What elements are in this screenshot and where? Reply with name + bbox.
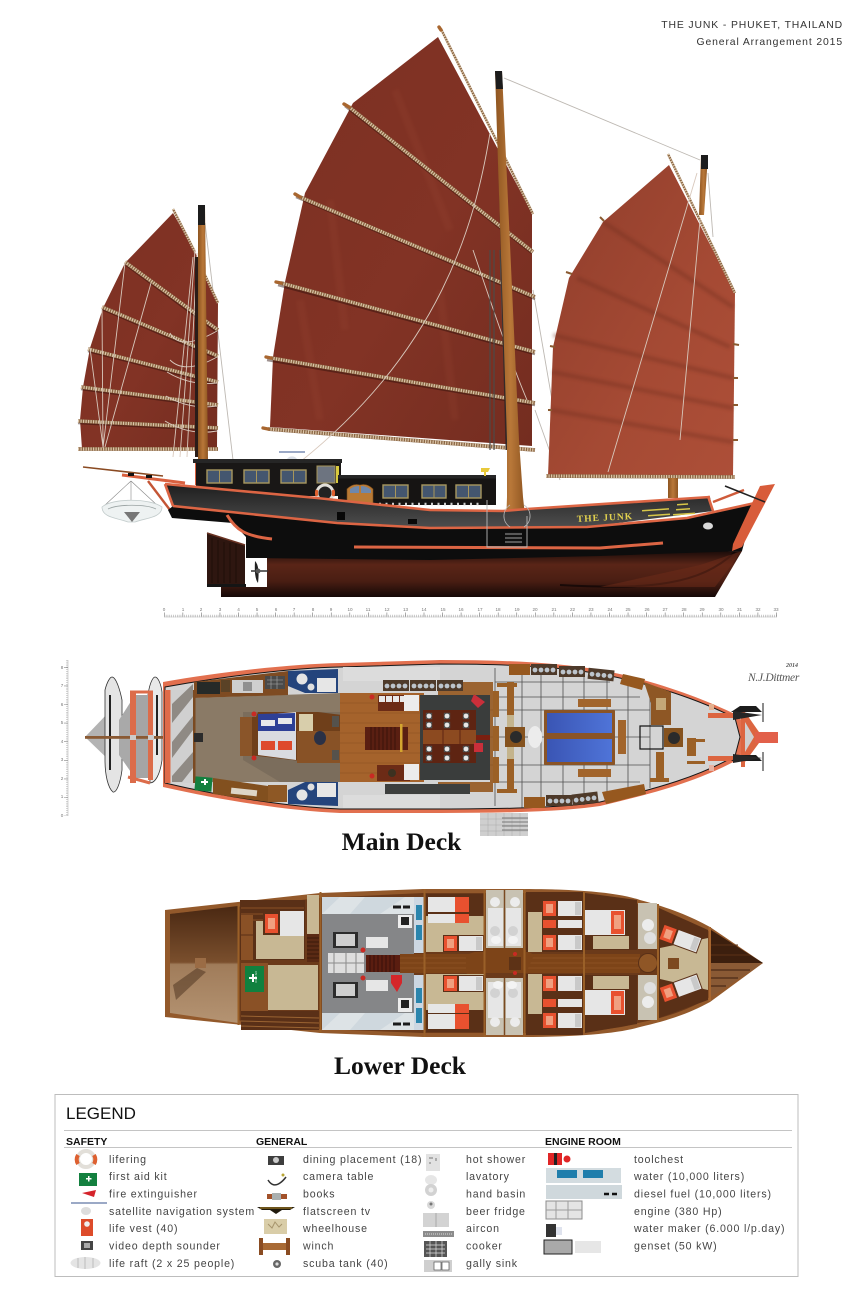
stern deck <box>165 690 193 783</box>
general column continued: gally sink <box>466 1258 518 1270</box>
vertical scale ruler: 5 <box>61 720 64 725</box>
icon: aircon <box>423 1231 454 1237</box>
icon: hot shower <box>426 1154 440 1171</box>
scale ruler: 18 <box>495 607 501 612</box>
dining area <box>420 682 493 792</box>
dinghy stern net and pontoons <box>85 677 172 792</box>
scale ruler: 31 <box>737 607 742 612</box>
general column continued: lavatory <box>466 1171 510 1183</box>
scale ruler: 22 <box>570 607 575 612</box>
aft hold <box>170 906 238 1023</box>
scale ruler: 28 <box>681 607 687 612</box>
blue hatch <box>544 699 626 777</box>
safety column: life vest (40) <box>109 1223 178 1235</box>
propeller <box>250 558 268 587</box>
safety column: first aid kit <box>109 1171 167 1183</box>
column headings: GENERAL <box>256 1136 308 1148</box>
first aid kit room: FIRST AID <box>255 971 258 983</box>
icon: water tanks <box>546 1168 621 1183</box>
scale ruler: 23 <box>588 607 594 612</box>
lower cabin <box>338 468 496 505</box>
vertical scale ruler: 8 <box>61 665 64 670</box>
column headings: ENGINE ROOM <box>545 1136 621 1148</box>
icon: video depth sounder <box>81 1241 93 1250</box>
lifering on cabin <box>316 485 334 501</box>
lower deck plan <box>165 889 763 1037</box>
icon: toolchest <box>548 1153 570 1165</box>
main sail <box>263 27 535 462</box>
general column <box>257 1154 422 1270</box>
aft cabin <box>240 895 319 962</box>
general column continued: beer fridge <box>466 1206 526 1218</box>
scale ruler: 8 <box>312 607 315 612</box>
aft twin cabins <box>426 894 484 1032</box>
vertical scale ruler: 2 <box>61 776 64 781</box>
safety column: lifering <box>109 1154 147 1166</box>
deck hull outline <box>163 660 756 813</box>
general column: flatscreen tv <box>303 1206 371 1218</box>
upper head <box>288 669 338 693</box>
engine room <box>322 897 424 1030</box>
heading: main deck: Main Deck <box>342 827 462 856</box>
vertical scale ruler <box>61 660 68 818</box>
lower hull outline <box>165 889 763 1037</box>
head compartments <box>486 890 523 1035</box>
icon: first aid kit <box>79 1173 97 1186</box>
scale ruler: 11 <box>366 607 371 612</box>
signature: N.J.Dittmer <box>747 672 800 684</box>
scale ruler: 27 <box>662 607 668 612</box>
icon: scuba tank <box>273 1260 281 1268</box>
scale ruler: 10 <box>347 607 353 612</box>
saloon wood floor <box>340 693 424 782</box>
title block: THE JUNK - PHUKET, THAILAND <box>661 20 843 31</box>
icon: hand basin <box>427 1201 435 1209</box>
boarding ladder <box>487 500 530 547</box>
icon: life raft <box>70 1257 100 1269</box>
masts <box>195 71 708 525</box>
scale ruler: 33 <box>773 607 779 612</box>
stem post <box>732 484 775 551</box>
scale ruler: 3 <box>219 607 222 612</box>
aft cockpit floor <box>193 693 340 782</box>
engine room column: diesel fuel (10,000 liters) <box>634 1188 772 1200</box>
foredeck planks <box>480 666 650 808</box>
vertical scale ruler: 7 <box>61 683 64 688</box>
icon: flatscreen tv <box>257 1207 295 1214</box>
rudder <box>207 533 246 587</box>
scale ruler: 19 <box>514 607 520 612</box>
scale ruler: 15 <box>440 607 446 612</box>
icon: life vest <box>81 1219 93 1236</box>
scale ruler: 14 <box>421 607 427 612</box>
rigging behind sails <box>205 78 713 480</box>
engine room column: water (10,000 liters) <box>633 1171 745 1183</box>
column headings: SAFETY <box>66 1136 107 1148</box>
safety column: fire extinguisher <box>109 1188 198 1200</box>
scale ruler: 17 <box>477 607 483 612</box>
general column: dining placement (18) <box>303 1154 422 1166</box>
general column continued: hand basin <box>466 1188 526 1200</box>
general column: books <box>303 1188 335 1200</box>
vertical scale ruler: 0 <box>61 813 64 818</box>
central corridor <box>366 948 640 980</box>
main deck plan <box>85 660 778 836</box>
icon: lifering <box>77 1151 95 1167</box>
scale ruler: 21 <box>551 607 557 612</box>
scale ruler: 2 <box>200 607 203 612</box>
scale ruler: 25 <box>625 607 631 612</box>
scale ruler: 24 <box>607 607 613 612</box>
forward heads <box>638 903 658 1020</box>
forward deck fittings <box>640 682 714 782</box>
scale ruler: 5 <box>256 607 259 612</box>
general column continued: cooker <box>466 1240 503 1252</box>
engine room column: water maker (6.000 l/p.day) <box>633 1223 785 1235</box>
sat nav dome <box>279 451 305 459</box>
icon: dining placement <box>268 1156 284 1165</box>
foredeck masts and benches <box>493 682 542 793</box>
engine room column: genset (50 kW) <box>634 1240 717 1252</box>
icon: satellite navigation <box>71 1202 107 1215</box>
scale ruler: 13 <box>403 607 408 612</box>
icon: cooker <box>424 1241 447 1257</box>
galley <box>194 671 288 698</box>
safety column: life raft (2 x 25 people) <box>109 1258 235 1270</box>
legend panel <box>55 1094 798 1276</box>
scale ruler: 1 <box>182 607 185 612</box>
scale ruler: 16 <box>458 607 464 612</box>
general column: winch <box>302 1240 334 1252</box>
orange rails <box>165 484 710 511</box>
general column: camera table <box>303 1171 374 1183</box>
scale ruler: 7 <box>293 607 296 612</box>
icon: diesel tanks <box>546 1185 622 1199</box>
scale ruler: 12 <box>384 607 390 612</box>
scale ruler: 20 <box>532 607 538 612</box>
title block <box>661 20 843 48</box>
side elevation of the junk <box>78 27 779 617</box>
general column continued: aircon <box>466 1223 500 1235</box>
signature <box>747 663 800 684</box>
safety column <box>70 1151 255 1270</box>
icon: fire extinguisher <box>82 1190 96 1197</box>
scale ruler: 9 <box>330 607 333 612</box>
heading: lower deck: Lower Deck <box>334 1051 467 1080</box>
underwater hull <box>221 551 742 597</box>
ship name: THE JUNK <box>577 512 633 525</box>
legend title: LEGEND <box>66 1104 136 1123</box>
vertical scale ruler: 6 <box>61 702 64 707</box>
vertical scale ruler: 1 <box>61 794 64 799</box>
forward double cabins <box>585 893 637 1033</box>
icon: camera table <box>268 1174 286 1185</box>
black topsides <box>168 503 755 560</box>
scale ruler: 32 <box>755 607 761 612</box>
engine room column: toolchest <box>634 1154 684 1166</box>
engine room column: engine (380 Hp) <box>634 1206 722 1218</box>
scale ruler: 30 <box>718 607 724 612</box>
general column continued: hot shower <box>466 1154 526 1166</box>
scale ruler <box>163 607 779 617</box>
icon: winch <box>259 1238 290 1255</box>
midship twin cabins <box>526 892 583 1035</box>
icon: water maker <box>546 1224 562 1237</box>
scale ruler: 29 <box>699 607 705 612</box>
scale ruler: 0 <box>163 607 166 612</box>
lower head <box>288 782 338 806</box>
first aid kit and aft bench <box>194 776 287 802</box>
icon: galley sink <box>424 1260 452 1272</box>
column headings <box>66 1136 621 1148</box>
icon: genset <box>544 1240 601 1254</box>
scale ruler: 4 <box>237 607 240 612</box>
icon: lavatory <box>425 1175 437 1196</box>
general column continued <box>423 1154 526 1272</box>
forecabin <box>658 908 708 1018</box>
vertical scale ruler: 3 <box>61 757 64 762</box>
wheelhouse <box>193 451 342 496</box>
bulwark band <box>165 484 713 528</box>
general column: scuba tank (40) <box>303 1258 388 1270</box>
dinghy on davits <box>102 481 162 522</box>
icon: beer fridge <box>423 1213 449 1227</box>
vertical scale ruler: 4 <box>61 739 64 744</box>
bulkheads <box>238 889 658 1037</box>
signature: 2014 <box>785 663 798 669</box>
forepeak <box>708 927 763 1001</box>
icon: books <box>267 1193 287 1200</box>
central cabin <box>240 712 352 763</box>
title block: General Arrangement 2015 <box>697 37 843 48</box>
hull name plate lines <box>642 503 695 516</box>
general column: wheelhouse <box>302 1223 368 1235</box>
deck seating <box>343 664 646 808</box>
mizzen sail <box>78 209 218 457</box>
hull <box>165 484 775 597</box>
icon: engine <box>546 1201 582 1219</box>
safety column: video depth sounder <box>109 1240 221 1252</box>
scale ruler: 26 <box>644 607 650 612</box>
safety column: satellite navigation system <box>109 1206 255 1218</box>
bow frame and propellers <box>708 703 778 771</box>
fore sail <box>546 154 739 477</box>
first aid kit room <box>241 963 319 1030</box>
scale ruler: 6 <box>275 607 278 612</box>
stern boom and davit <box>83 467 185 510</box>
icon: wheelhouse chart <box>264 1219 287 1234</box>
boarding platform <box>480 813 528 836</box>
engine room column <box>544 1153 785 1254</box>
